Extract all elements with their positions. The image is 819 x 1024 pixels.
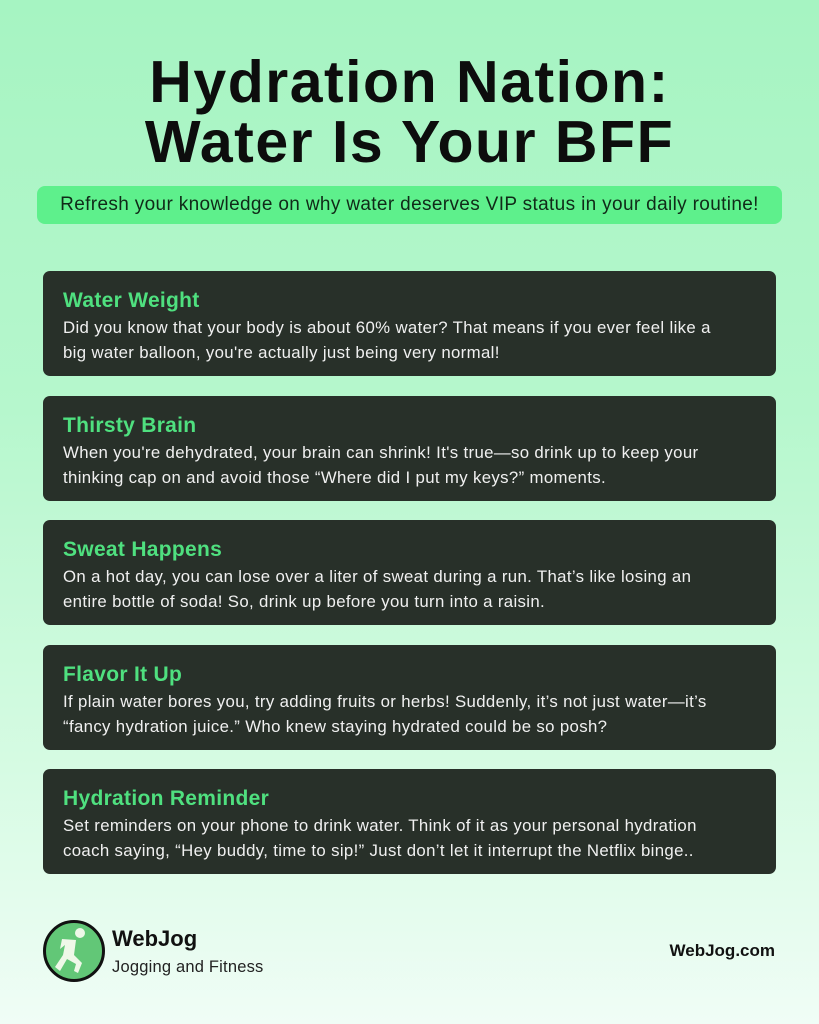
brand name: WebJog [112,926,197,951]
subtitle banner: Refresh your knowledge on why water deserves VIP status in your daily routine! [60,194,759,215]
title: Hydration Nation: [149,49,670,115]
panel: thirsty brain: thinking cap on and avoid those “Where did I put my keys?” moments. [63,468,606,487]
panel: flavor it up: “fancy hydration juice.” Who knew staying hydrated could be so posh? [63,717,607,736]
panel: hydration reminder: Hydration Reminder [63,787,269,810]
panel: sweat happens: On a hot day, you can lose over a liter of sweat during a run. That’s like losing an [63,567,691,586]
panel: water weight: Water Weight [63,289,200,312]
tagline: Jogging and Fitness [112,958,263,976]
panel: thirsty brain: When you're dehydrated, your brain can shrink! It's true—so drink up to keep your [63,443,698,462]
panel: thirsty brain [43,396,776,501]
subtitle banner [37,186,782,224]
title [145,49,674,175]
title: Water Is Your BFF [145,109,674,175]
panel: flavor it up: If plain water bores you, try adding fruits or herbs! Suddenly, it’s not just water—it’s [63,692,707,711]
panel: flavor it up: Flavor It Up [63,663,182,686]
panel: sweat happens: entire bottle of soda! So, drink up before you turn into a raisin. [63,592,545,611]
panel: water weight: big water balloon, you're actually just being very normal! [63,343,500,362]
panel: hydration reminder: coach saying, “Hey buddy, time to sip!” Just don’t let it interrupt the Netflix binge.. [63,841,694,860]
panel: sweat happens [43,520,776,625]
panel: hydration reminder: Set reminders on your phone to drink water. Think of it as your personal hydration [63,816,697,835]
website url: WebJog.com [670,941,775,960]
panel: hydration reminder [43,769,776,874]
panel: water weight: Did you know that your body is about 60% water? That means if you ever feel like a [63,318,711,337]
panel: thirsty brain: Thirsty Brain [63,414,196,437]
icon: runner logo [43,920,105,982]
panel: sweat happens: Sweat Happens [63,538,222,561]
panel: water weight [43,271,776,376]
panel: flavor it up [43,645,776,750]
